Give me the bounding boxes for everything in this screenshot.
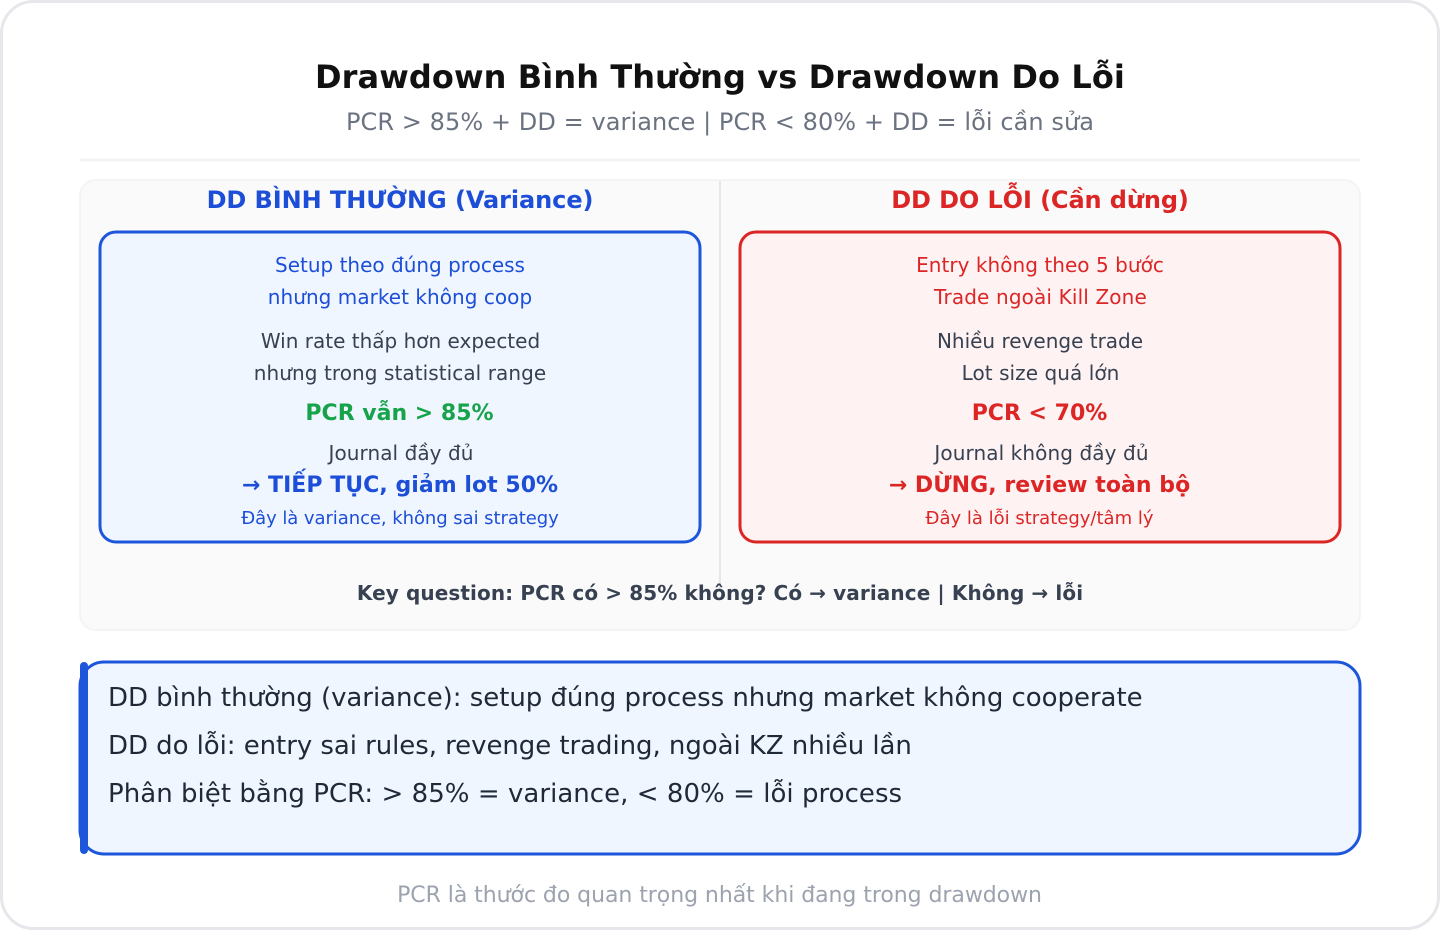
text: variance process: nhưng market không coop bbox=[268, 285, 532, 309]
text: variance win rate bbox=[254, 329, 546, 385]
box: error bbox=[740, 232, 1340, 542]
text: variance PCR: PCR vẫn > 85% bbox=[305, 401, 494, 426]
text: error revenge bbox=[937, 329, 1143, 385]
heading: variance: DD BÌNH THƯỜNG (Variance) bbox=[207, 184, 593, 214]
text: variance journal: Journal đầy đủ bbox=[326, 441, 474, 465]
text: error PCR: PCR < 70% bbox=[972, 401, 1107, 426]
text: error entry bbox=[916, 253, 1164, 309]
text: variance process bbox=[268, 253, 532, 309]
text: error revenge: Nhiều revenge trade bbox=[937, 329, 1143, 353]
summary lines: Phân biệt bằng PCR: > 85% = variance, < 80% = lỗi process bbox=[108, 778, 902, 809]
text: variance process: Setup theo đúng process bbox=[275, 253, 525, 277]
footer note: PCR là thước đo quan trọng nhất khi đang trong drawdown bbox=[397, 883, 1042, 908]
box: variance bbox=[100, 232, 700, 542]
text: error note: Đây là lỗi strategy/tâm lý bbox=[926, 508, 1154, 529]
text: variance win rate: Win rate thấp hơn expected bbox=[261, 329, 540, 353]
text: variance action: → TIẾP TỤC, giảm lot 50% bbox=[242, 469, 558, 498]
text: error entry: Entry không theo 5 bước bbox=[916, 253, 1164, 277]
callout: summary bbox=[80, 662, 1360, 854]
text: error entry: Trade ngoài Kill Zone bbox=[933, 285, 1147, 309]
text: variance win rate: nhưng trong statistical range bbox=[254, 361, 546, 385]
title: Drawdown Bình Thường vs Drawdown Do Lỗi bbox=[315, 58, 1125, 96]
heading: error: DD DO LỖI (Cần dừng) bbox=[891, 181, 1189, 214]
key question: Key question: PCR có > 85% không? Có → variance | Không → lỗi bbox=[357, 581, 1083, 605]
text: error revenge: Lot size quá lớn bbox=[962, 361, 1119, 385]
subtitle: PCR > 85% + DD = variance | PCR < 80% + DD = lỗi cần sửa bbox=[346, 107, 1094, 136]
summary lines: DD bình thường (variance): setup đúng process nhưng market không cooperate bbox=[108, 683, 1143, 713]
column: normal drawdown bbox=[100, 184, 700, 542]
text: error journal: Journal không đầy đủ bbox=[932, 441, 1149, 465]
summary lines bbox=[108, 683, 1143, 809]
text: variance note: Đây là variance, không sai strategy bbox=[241, 508, 559, 529]
panel: comparison bbox=[80, 180, 1360, 630]
summary lines: DD do lỗi: entry sai rules, revenge trading, ngoài KZ nhiều lần bbox=[108, 730, 912, 761]
column: error drawdown bbox=[740, 181, 1340, 542]
text: error action: → DỪNG, review toàn bộ bbox=[889, 472, 1190, 498]
